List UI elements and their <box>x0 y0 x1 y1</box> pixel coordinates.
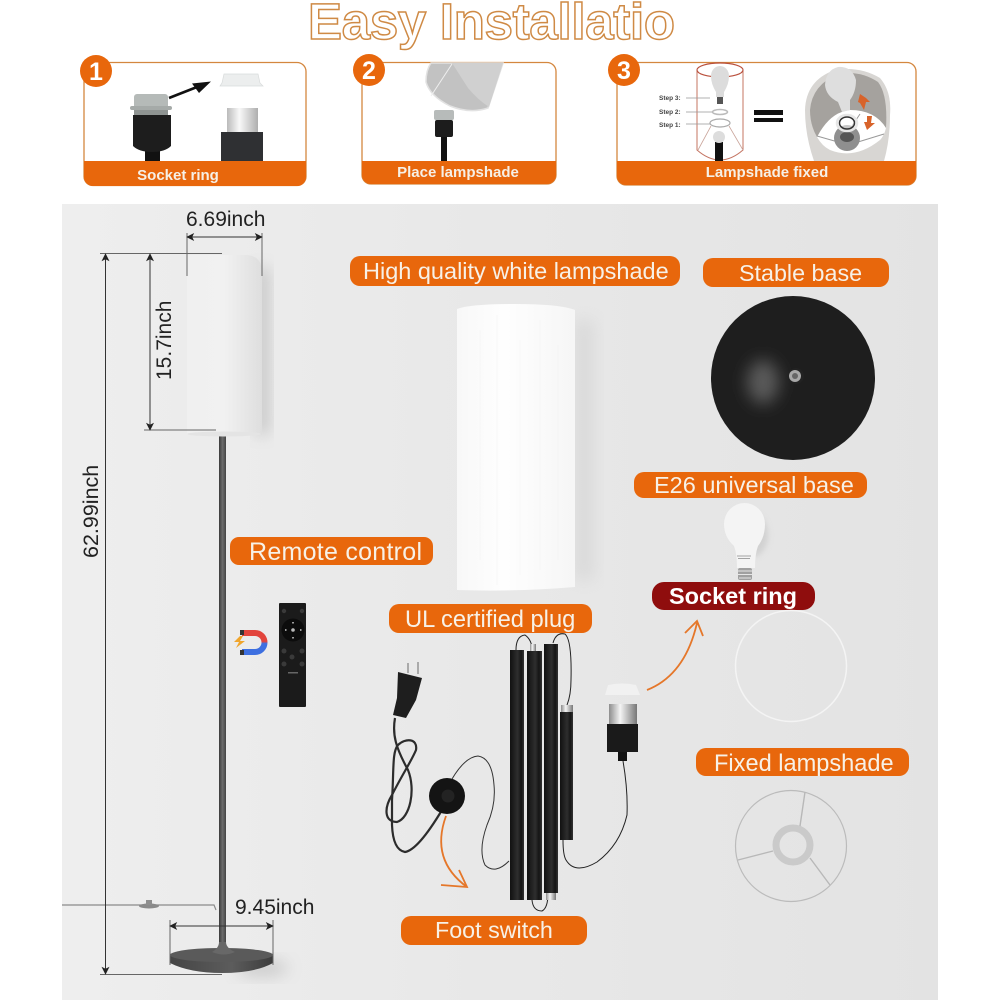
dimension: shade width <box>186 208 265 276</box>
panel: product details background <box>62 204 938 1000</box>
step 1 number badge <box>80 55 112 87</box>
step 3 caption band <box>617 161 916 185</box>
label: socket ring: Socket ring <box>669 583 797 609</box>
label: foot switch: Foot switch <box>435 917 553 943</box>
step 2 caption band: Place lampshade <box>397 164 519 181</box>
equals sign <box>754 110 783 122</box>
foot switch on floor cord <box>62 900 216 910</box>
label: E26 universal base: E26 universal base <box>654 472 854 498</box>
label: remote control: Remote control <box>249 538 422 566</box>
step 1 caption band: Socket ring <box>137 167 219 184</box>
step 1 caption band <box>84 161 306 186</box>
label: fixed lampshade: Fixed lampshade <box>714 751 894 777</box>
plug with coiled cord <box>387 662 442 852</box>
dimension: shade height <box>100 254 222 430</box>
socket and stem <box>434 110 454 161</box>
step 3 number badge <box>608 54 640 86</box>
fixed lampshade frame <box>736 790 846 902</box>
label: UL certified plug: UL certified plug <box>405 607 575 633</box>
step 2 caption band <box>362 161 556 184</box>
label: stable base <box>703 258 889 287</box>
bare socket <box>221 108 263 161</box>
white lampshade <box>457 304 594 591</box>
panel: step 1 socket ring <box>80 55 306 186</box>
exploded diagram <box>686 63 743 161</box>
step 2 number badge: 2 <box>362 57 376 85</box>
icon: magnet <box>234 630 264 655</box>
arrow to ring <box>169 82 211 98</box>
step labels: Step 1: <box>659 122 681 129</box>
dimension: base width <box>170 896 314 965</box>
label: high quality white lampshade: High quality white lampshade <box>363 258 669 284</box>
label 9.45inch: 9.45inch <box>235 896 314 919</box>
LED bulb <box>724 503 768 580</box>
socket ring wire hoop <box>736 610 846 722</box>
step 3 caption band: Lampshade fixed <box>706 164 828 181</box>
label 15.7inch: 15.7inch <box>153 301 176 380</box>
label: foot switch <box>401 916 587 945</box>
label 62.99inch: 62.99inch <box>79 465 103 558</box>
arrow: foot switch callout <box>441 816 467 887</box>
lampshade tilted <box>426 63 503 111</box>
assembled floor lamp <box>170 255 288 976</box>
arrow: socket ring to label <box>647 621 703 690</box>
step labels: Step 2: <box>659 109 681 116</box>
remote control <box>279 603 306 707</box>
step 2 number badge <box>353 54 385 86</box>
removed socket ring <box>220 74 263 86</box>
socket with ring attached <box>130 94 172 161</box>
panel: step 2 place lampshade <box>353 54 556 184</box>
step labels: Step 3: <box>659 95 681 102</box>
foot switch <box>429 778 465 814</box>
stable base underside <box>711 296 875 460</box>
step labels <box>659 95 681 129</box>
label: stable base: Stable base <box>739 260 862 286</box>
fixed lampshade view <box>805 67 890 161</box>
lamp pole segments with wiring <box>452 634 627 911</box>
panel: step 3 lampshade fixed <box>608 54 916 185</box>
lamp socket with ring <box>605 684 640 761</box>
step 3 number badge: 3 <box>617 57 631 85</box>
step 1 number badge: 1 <box>89 58 103 86</box>
label 6.69inch: 6.69inch <box>186 208 265 231</box>
